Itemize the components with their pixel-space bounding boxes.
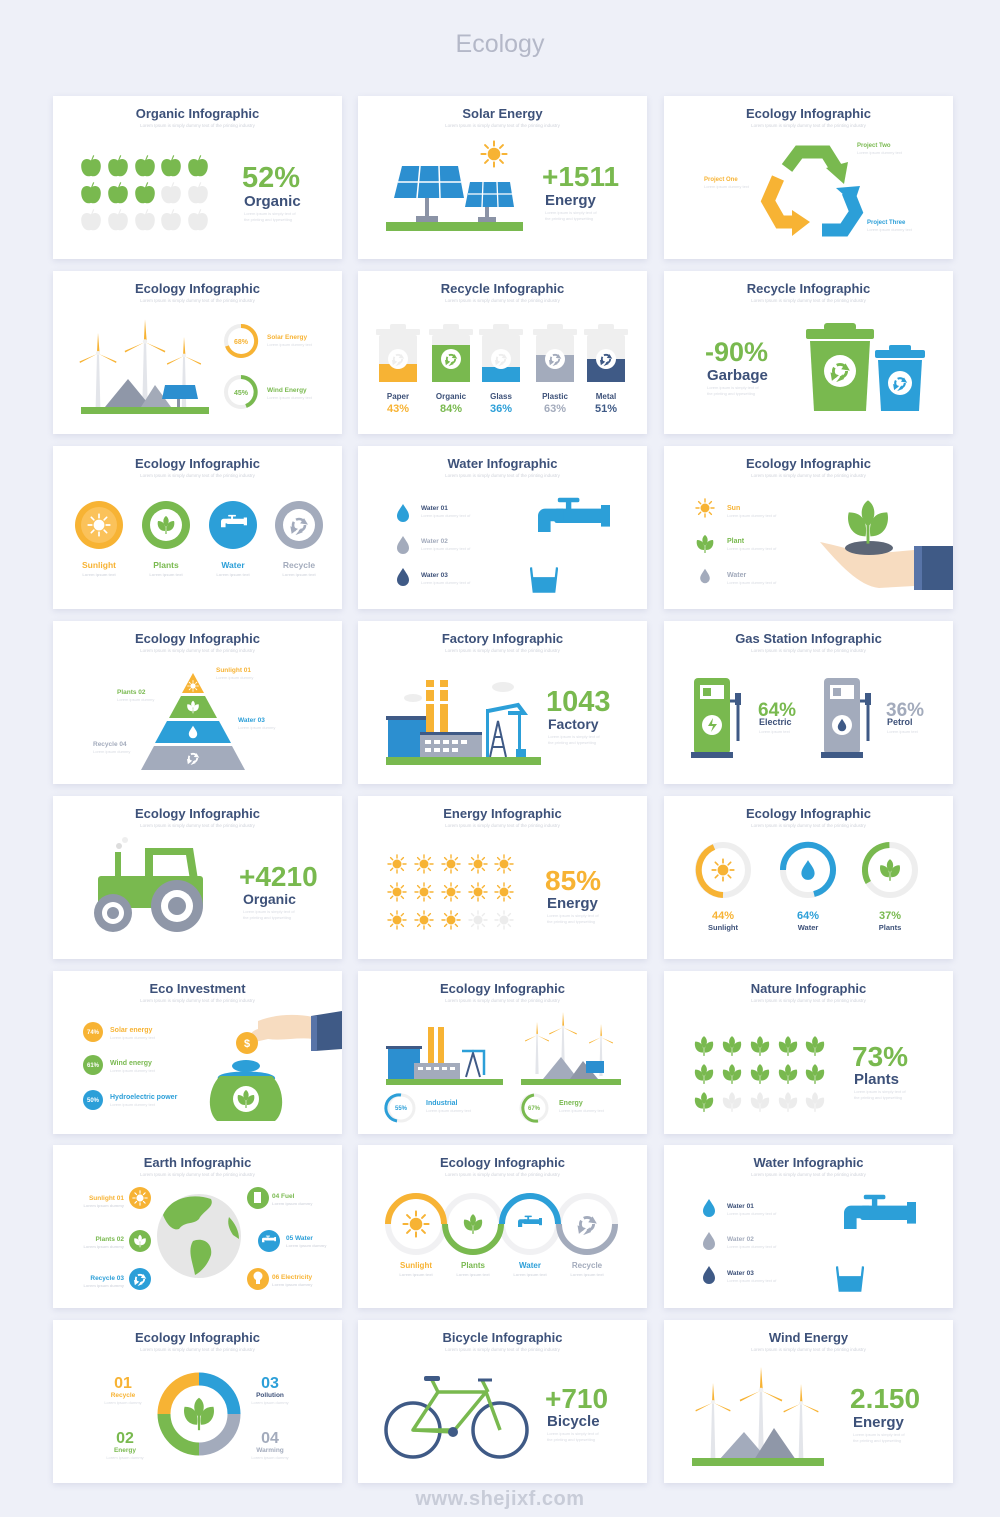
panel: Ecology Infographic wind: [53, 271, 342, 434]
diagram: wave circles: Plants: [461, 1261, 486, 1270]
chart: apple grid 52%: the printing and typesetting: [244, 217, 292, 222]
chart: pyramid: Plants 02: [117, 689, 146, 696]
illustration: solar panels: +1511: [542, 161, 619, 192]
illustration: wind turbines: 2.150: [850, 1383, 920, 1414]
illustration: turbines and donuts: [80, 320, 313, 414]
chart: apple grid 52%: Lorem ipsum is simply text of: [244, 211, 296, 216]
heading: Gas Station Infographic: [735, 631, 882, 646]
diagram: recycle arrows: Lorem ipsum dummy text: [857, 150, 903, 155]
heading: Ecology Infographic: [135, 631, 260, 646]
illustration: globe with icons: [84, 1187, 327, 1290]
panel: Organic Infographic: [53, 96, 342, 259]
heading: Ecology Infographic: [135, 806, 260, 821]
panel: Solar Energy: [358, 96, 647, 259]
chart: apple grid 52%: 52%: [242, 162, 300, 194]
diagram: wave circles: Lorem ipsum text: [399, 1272, 433, 1277]
chart: recycle bins: 36%: [490, 403, 512, 415]
heading: Solar Energy: [462, 106, 543, 121]
chart: sun grid 85%: 85%: [545, 865, 601, 896]
illustration: globe with icons: 04 Fuel: [272, 1193, 295, 1200]
chart: quadrant donut: Warming: [256, 1447, 284, 1454]
illustration: wind turbines: the printing and typesetting: [853, 1438, 901, 1443]
panel: Recycle Infographic garbage: [664, 271, 953, 434]
chart: sun grid 85%: Energy: [547, 895, 599, 912]
chart: three donuts: Sunlight: [708, 923, 738, 932]
heading: Ecology Infographic: [135, 281, 260, 296]
chart: three donuts: Water: [798, 923, 818, 932]
diagram: wave circles: Sunlight: [400, 1261, 432, 1270]
chart: quadrant donut: Energy: [114, 1447, 136, 1454]
heading: Ecology Infographic: [135, 1330, 260, 1345]
heading: Ecology Infographic: [746, 106, 871, 121]
chart: recycle bins: Metal: [596, 392, 616, 401]
chart: quadrant donut: Lorem ipsum dummy: [104, 1400, 142, 1405]
illustration: factory: Factory: [548, 716, 599, 732]
panel: Energy Infographic: [358, 796, 647, 959]
heading: Nature Infographic: [751, 981, 866, 996]
illustration: drops, faucet, cup: Lorem ipsum dummy text of: [421, 513, 471, 518]
illustration: investment list and purse: [83, 1011, 342, 1121]
chart: pyramid: Sunlight 01: [216, 667, 251, 674]
subtitle: Lorem Ipsum is simply dummy text of the printing industry: [751, 998, 866, 1003]
illustration: wind turbines: Lorem ipsum is simply text of: [853, 1432, 905, 1437]
illustration: globe with icons: Lorem ipsum dummy: [84, 1283, 125, 1288]
illustration: drops, faucet, cup: Lorem ipsum dummy text of: [727, 1244, 777, 1249]
illustration: turbines and donuts: Lorem ipsum dummy text: [267, 395, 313, 400]
illustration: globe with icons: Sunlight 01: [89, 1195, 124, 1202]
illustration: drops, faucet, cup: Lorem ipsum dummy text of: [727, 1211, 777, 1216]
illustration: bicycle: the printing and typesetting: [547, 1437, 595, 1442]
heading: Water Infographic: [447, 456, 558, 471]
chart: sun grid 85%: Lorem ipsum is simply text of: [547, 913, 599, 918]
illustration: garbage bins: -90%: [705, 337, 768, 367]
illustration: gas pumps: Lorem ipsum text: [887, 729, 919, 734]
panel: Ecology Infographic circles: [53, 446, 342, 609]
illustration: investment list and purse: 61%: [87, 1063, 100, 1069]
heading: Ecology Infographic: [440, 981, 565, 996]
panel: Gas Station Infographic: [664, 621, 953, 784]
chart: pyramid: [93, 667, 276, 770]
panel: Recycle Infographic bins: [358, 271, 647, 434]
subtitle: Lorem Ipsum is simply dummy text of the printing industry: [751, 648, 866, 653]
illustration: drops, faucet, cup: Water 02: [421, 538, 448, 545]
chart: recycle bins: Glass: [490, 392, 512, 401]
diagram: wave circles: Lorem ipsum text: [570, 1272, 604, 1277]
diagram: recycle arrows: Lorem ipsum dummy text: [704, 184, 750, 189]
illustration: turbines and donuts: 45%: [234, 390, 249, 397]
illustration: gas pumps: [691, 678, 924, 758]
chart: three donuts: 64%: [797, 910, 819, 922]
panel: Water Infographic 2: [664, 1145, 953, 1308]
chart: sun grid 85%: [387, 854, 601, 930]
chart: apple grid 52%: Organic: [244, 193, 301, 210]
subtitle: Lorem Ipsum is simply dummy text of the printing industry: [751, 823, 866, 828]
illustration: hand with plant: Lorem ipsum dummy text of: [727, 513, 777, 518]
illustration: drops, faucet, cup: Lorem ipsum dummy text of: [727, 1278, 777, 1283]
heading: Recycle Infographic: [441, 281, 564, 296]
illustration: globe with icons: Recycle 03: [90, 1275, 124, 1282]
chart: quadrant donut: Lorem ipsum dummy: [251, 1455, 289, 1460]
diagram: wave circles: Water: [519, 1261, 541, 1270]
illustration: hand with plant: Sun: [727, 505, 740, 512]
illustration: investment list and purse: 74%: [87, 1030, 100, 1036]
chart: recycle bins: 84%: [440, 403, 462, 415]
illustration: bicycle: Lorem ipsum is simply text of: [547, 1431, 599, 1436]
illustration: investment list and purse: Wind energy: [110, 1060, 152, 1067]
chart: recycle bins: 51%: [595, 403, 617, 415]
illustration: factory and turbines: Lorem ipsum dummy text: [426, 1108, 472, 1113]
illustration: drops, faucet, cup: Water 03: [727, 1270, 754, 1277]
illustration: investment list and purse: Lorem ipsum dummy text: [110, 1102, 156, 1107]
heading: Factory Infographic: [442, 631, 563, 646]
heading: Ecology Infographic: [746, 456, 871, 471]
chart: pyramid: Lorem ipsum dummy: [238, 725, 275, 730]
heading: Wind Energy: [769, 1330, 848, 1345]
icons: four categories: Sunlight: [82, 560, 116, 570]
panel: Bicycle Infographic: [358, 1320, 647, 1483]
subtitle: Lorem Ipsum is simply dummy text of the printing industry: [140, 1347, 255, 1352]
diagram: recycle arrows: [704, 142, 913, 236]
illustration: drops, faucet, cup: Water 01: [727, 1203, 754, 1210]
subtitle: Lorem Ipsum is simply dummy text of the printing industry: [751, 473, 866, 478]
heading: Recycle Infographic: [747, 281, 870, 296]
illustration: solar panels: the printing and typesetting: [545, 216, 593, 221]
diagram: recycle arrows: Project One: [704, 177, 738, 183]
illustration: tractor: [94, 837, 318, 932]
subtitle: Lorem Ipsum is simply dummy text of the printing industry: [445, 473, 560, 478]
heading: Ecology Infographic: [135, 456, 260, 471]
illustration: solar panels: [386, 140, 619, 231]
illustration: bicycle: [384, 1376, 608, 1459]
illustration: factory: Lorem ipsum is simply text of: [548, 734, 600, 739]
chart: recycle bins: [376, 324, 628, 415]
illustration: hand with plant: Water: [727, 572, 746, 579]
illustration: hand with plant: Plant: [727, 538, 745, 545]
illustration: drops, faucet, cup: Water 02: [727, 1236, 754, 1243]
icons: four categories: [75, 501, 323, 577]
panel: Ecology Infographic wave: [358, 1145, 647, 1308]
chart: leaf grid 73%: the printing and typesetting: [854, 1095, 902, 1100]
chart: pyramid: Lorem ipsum dummy: [216, 675, 253, 680]
chart: recycle bins: 43%: [387, 403, 409, 415]
illustration: investment list and purse: Solar energy: [110, 1027, 153, 1034]
subtitle: Lorem Ipsum is simply dummy text of the printing industry: [751, 298, 866, 303]
chart: three donuts: 37%: [879, 910, 901, 922]
illustration: tractor: Lorem ipsum is simply text of: [243, 909, 295, 914]
heading: Energy Infographic: [443, 806, 562, 821]
illustration: factory: the printing and typesetting: [548, 740, 596, 745]
illustration: drops, faucet, cup: Lorem ipsum dummy text of: [421, 580, 471, 585]
illustration: drops, faucet, cup: [397, 498, 610, 593]
illustration: drops, faucet, cup: Water 01: [421, 505, 448, 512]
illustration: factory and turbines: Lorem ipsum dummy text: [559, 1108, 605, 1113]
chart: quadrant donut: Lorem ipsum dummy: [251, 1400, 289, 1405]
icons: four categories: Lorem ipsum text: [282, 572, 316, 577]
illustration: hand with plant: Lorem ipsum dummy text of: [727, 546, 777, 551]
chart: recycle bins: Organic: [436, 392, 467, 401]
title: Ecology: [456, 30, 544, 58]
chart: quadrant donut: Pollution: [256, 1392, 284, 1399]
heading: Bicycle Infographic: [443, 1330, 562, 1345]
illustration: hand with plant: Lorem ipsum dummy text of: [727, 580, 777, 585]
illustration: globe with icons: Lorem ipsum dummy: [84, 1244, 125, 1249]
subtitle: Lorem Ipsum is simply dummy text of the printing industry: [751, 123, 866, 128]
illustration: globe with icons: Plants 02: [95, 1236, 124, 1243]
illustration: turbines and donuts: 68%: [234, 339, 249, 346]
illustration: garbage bins: Lorem ipsum is simply text of: [707, 385, 759, 390]
icons: four categories: Lorem ipsum text: [149, 572, 183, 577]
panel: Wind Energy: [664, 1320, 953, 1483]
illustration: drops, faucet, cup: [703, 1194, 916, 1292]
watermark: www.shejixf.com: [415, 1488, 585, 1510]
illustration: factory and turbines: Industrial: [426, 1100, 458, 1107]
illustration: factory: [386, 680, 611, 765]
chart: sun grid 85%: the printing and typesetting: [547, 919, 595, 924]
panel: Ecology Infographic tractor: [53, 796, 342, 959]
illustration: investment list and purse: 50%: [87, 1098, 100, 1104]
icons: four categories: Lorem ipsum text: [216, 572, 250, 577]
chart: recycle bins: Paper: [387, 392, 409, 401]
panel: Ecology Infographic recycle: [664, 96, 953, 259]
illustration: factory and turbines: Energy: [559, 1100, 583, 1107]
subtitle: Lorem Ipsum is simply dummy text of the printing industry: [140, 1172, 255, 1177]
subtitle: Lorem Ipsum is simply dummy text of the printing industry: [140, 473, 255, 478]
chart: leaf grid 73%: [694, 1036, 908, 1112]
chart: recycle bins: 63%: [544, 403, 566, 415]
illustration: gas pumps: Lorem ipsum text: [759, 729, 791, 734]
diagram: wave circles: Lorem ipsum text: [513, 1272, 547, 1277]
panel: Factory Infographic: [358, 621, 647, 784]
panel: Ecology Infographic hand: [664, 446, 953, 609]
illustration: globe with icons: Lorem ipsum dummy: [286, 1243, 327, 1248]
heading: Earth Infographic: [144, 1155, 251, 1170]
panel: Ecology Infographic industrial vs energy: [358, 971, 647, 1134]
chart: leaf grid 73%: Plants: [854, 1071, 899, 1088]
diagram: wave circles: Recycle: [572, 1261, 603, 1270]
illustration: drops, faucet, cup: Water 03: [421, 572, 448, 579]
illustration: globe with icons: Lorem ipsum dummy: [272, 1201, 313, 1206]
subtitle: Lorem Ipsum is simply dummy text of the printing industry: [140, 298, 255, 303]
subtitle: Lorem Ipsum is simply dummy text of the printing industry: [751, 1172, 866, 1177]
illustration: gas pumps: 36%: [886, 700, 924, 721]
subtitle: Lorem Ipsum is simply dummy text of the printing industry: [445, 648, 560, 653]
illustration: gas pumps: Petrol: [887, 717, 913, 727]
illustration: turbines and donuts: Solar Energy: [267, 334, 307, 341]
diagram: wave circles: Lorem ipsum text: [456, 1272, 490, 1277]
illustration: garbage bins: [705, 323, 925, 411]
illustration: globe with icons: Lorem ipsum dummy: [84, 1203, 125, 1208]
subtitle: Lorem Ipsum is simply dummy text of the printing industry: [445, 1347, 560, 1352]
heading: Eco Investment: [149, 981, 246, 996]
subtitle: Lorem Ipsum is simply dummy text of the printing industry: [445, 1172, 560, 1177]
illustration: investment list and purse: Hydroelectric power: [110, 1094, 178, 1101]
chart: three donuts: [695, 842, 918, 932]
illustration: wind turbines: [692, 1368, 920, 1466]
illustration: drops, faucet, cup: Lorem ipsum dummy text of: [421, 546, 471, 551]
subtitle: Lorem Ipsum is simply dummy text of the printing industry: [140, 998, 255, 1003]
chart: quadrant donut: [104, 1372, 289, 1460]
illustration: bicycle: +710: [545, 1383, 608, 1414]
heading: Ecology Infographic: [440, 1155, 565, 1170]
chart: quadrant donut: 02: [116, 1430, 134, 1447]
illustration: hand with plant: [695, 498, 953, 590]
illustration: investment list and purse: Lorem ipsum dummy text: [110, 1035, 156, 1040]
illustration: garbage bins: Garbage: [707, 367, 768, 384]
illustration: factory and turbines: [384, 1012, 621, 1123]
icons: four categories: Lorem ipsum text: [82, 572, 116, 577]
subtitle: Lorem Ipsum is simply dummy text of the printing industry: [751, 1347, 866, 1352]
panel: Ecology Infographic donut quadrants: [53, 1320, 342, 1483]
diagram: wave circles: [385, 1193, 618, 1277]
illustration: investment list and purse: Lorem ipsum dummy text: [110, 1068, 156, 1073]
illustration: globe with icons: Lorem ipsum dummy: [272, 1282, 313, 1287]
subtitle: Lorem Ipsum is simply dummy text of the printing industry: [140, 823, 255, 828]
heading: Water Infographic: [753, 1155, 864, 1170]
illustration: globe with icons: 05 Water: [286, 1235, 313, 1242]
illustration: tractor: Organic: [243, 891, 296, 907]
chart: quadrant donut: 01: [114, 1375, 132, 1392]
illustration: solar panels: Lorem ipsum is simply text of: [545, 210, 597, 215]
icons: four categories: Recycle: [283, 560, 315, 570]
diagram: recycle arrows: Project Two: [857, 143, 891, 149]
diagram: recycle arrows: Project Three: [867, 220, 906, 226]
chart: recycle bins: Plastic: [542, 392, 568, 401]
illustration: factory: 1043: [546, 686, 611, 718]
illustration: globe with icons: 06 Electricity: [272, 1274, 312, 1281]
diagram: recycle arrows: Lorem ipsum dummy text: [867, 227, 913, 232]
illustration: factory and turbines: 67%: [528, 1106, 541, 1112]
chart: quadrant donut: Recycle: [111, 1392, 136, 1399]
chart: pyramid: Lorem ipsum dummy: [93, 749, 130, 754]
heading: Organic Infographic: [136, 106, 259, 121]
illustration: bicycle: Bicycle: [547, 1413, 600, 1430]
panel: Eco Investment: [53, 971, 342, 1134]
chart: pyramid: Water 03: [238, 717, 265, 724]
icons: four categories: Water: [221, 560, 245, 570]
subtitle: Lorem Ipsum is simply dummy text of the printing industry: [445, 123, 560, 128]
subtitle: Lorem Ipsum is simply dummy text of the printing industry: [445, 998, 560, 1003]
chart: quadrant donut: Lorem ipsum dummy: [106, 1455, 144, 1460]
illustration: solar panels: Energy: [545, 192, 597, 209]
panel: Ecology Infographic pyramid: [53, 621, 342, 784]
illustration: tractor: +4210: [239, 861, 318, 892]
subtitle: Lorem Ipsum is simply dummy text of the printing industry: [140, 123, 255, 128]
subtitle: Lorem Ipsum is simply dummy text of the printing industry: [445, 823, 560, 828]
illustration: investment list and purse: $: [244, 1038, 250, 1050]
chart: leaf grid 73%: Lorem ipsum is simply text of: [854, 1089, 906, 1094]
panel: Water Infographic: [358, 446, 647, 609]
chart: quadrant donut: 03: [261, 1375, 279, 1392]
panel: Ecology Infographic donuts: [664, 796, 953, 959]
panel: Nature Infographic: [664, 971, 953, 1134]
illustration: wind turbines: Energy: [853, 1414, 905, 1431]
illustration: factory and turbines: 55%: [395, 1106, 408, 1112]
subtitle: Lorem Ipsum is simply dummy text of the printing industry: [140, 648, 255, 653]
chart: quadrant donut: 04: [261, 1430, 279, 1447]
illustration: turbines and donuts: Wind Energy: [267, 387, 307, 394]
illustration: turbines and donuts: Lorem ipsum dummy text: [267, 342, 313, 347]
chart: pyramid: Recycle 04: [93, 741, 127, 748]
chart: three donuts: 44%: [712, 910, 734, 922]
subtitle: Lorem Ipsum is simply dummy text of the printing industry: [445, 298, 560, 303]
panel: Earth Infographic: [53, 1145, 342, 1308]
chart: leaf grid 73%: 73%: [852, 1041, 908, 1072]
heading: Ecology Infographic: [746, 806, 871, 821]
illustration: gas pumps: Electric: [759, 717, 792, 727]
chart: apple grid 52%: [81, 155, 301, 230]
icons: four categories: Plants: [153, 560, 179, 570]
chart: pyramid: Lorem ipsum dummy: [117, 697, 154, 702]
illustration: tractor: the printing and typesetting: [243, 915, 291, 920]
chart: three donuts: Plants: [879, 923, 901, 932]
illustration: garbage bins: the printing and typesetting: [707, 391, 755, 396]
illustration: gas pumps: 64%: [758, 700, 796, 721]
